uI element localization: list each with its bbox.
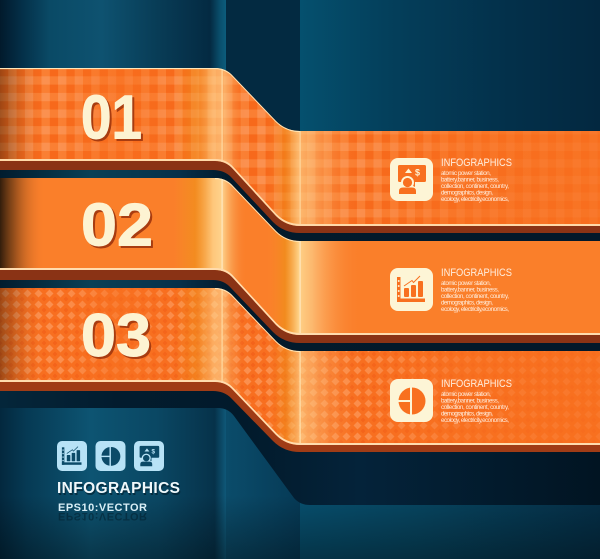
text block: ribbon 1: atomic power station, (441, 170, 491, 177)
text block: ribbon 3: INFOGRAPHICS (441, 378, 512, 390)
icon: bar chart on ribbon 2 (390, 268, 433, 311)
text block: ribbon 2: demographics, design, (441, 300, 493, 306)
ribbon 3 under-shadow (0, 381, 600, 452)
footer title: INFOGRAPHICS (57, 480, 180, 497)
footer subtitle with reflection (58, 502, 147, 522)
text block: ribbon 1: demographics, design, (441, 190, 493, 196)
ribbon 2: plain band (0, 170, 600, 340)
text block: ribbon 3: ecology, electricity,economics, (441, 417, 509, 424)
text block: ribbon 2: atomic power station, (441, 280, 491, 287)
number 01: 01 (83, 86, 144, 154)
text block: ribbon 3 (441, 378, 512, 424)
text block: ribbon 1 (441, 157, 512, 203)
number 02: 02 (81, 192, 153, 258)
text block: ribbon 2: collection, continent, country, (441, 293, 509, 300)
text block: ribbon 3: collection, continent, country, (441, 404, 509, 411)
number 02: 02 (83, 194, 155, 260)
text block: ribbon 1: INFOGRAPHICS (441, 157, 512, 169)
text block: ribbon 1: battery,banner, business, (441, 176, 499, 184)
footer title: INFOGRAPHICS (58, 482, 181, 499)
text block: ribbon 1: collection, continent, country, (441, 183, 509, 190)
background: bottom panels (0, 400, 600, 559)
icon: small pie (96, 441, 126, 471)
number 01: 01 (81, 84, 142, 152)
text block: ribbon 1: ecology, electricity,economics, (441, 196, 509, 203)
icon: small chart (57, 441, 87, 471)
text block: ribbon 2: ecology, electricity,economics, (441, 306, 509, 313)
icon: small presenter (134, 441, 164, 471)
footer subtitle with reflection: EPS10:VECTOR (58, 510, 147, 522)
lower dark shadow band (0, 385, 600, 505)
text block: ribbon 2: INFOGRAPHICS (441, 267, 512, 279)
number 03: 03 (83, 304, 153, 371)
text block: ribbon 2: battery,banner, business, (441, 286, 499, 294)
text block: ribbon 3: battery,banner, business, (441, 398, 499, 404)
number 03: 03 (81, 302, 151, 369)
ribbon 3: diamond band (0, 280, 600, 450)
footer subtitle with reflection: EPS10:VECTOR (58, 502, 147, 514)
ribbon 1: checker band (0, 60, 600, 230)
ribbon 2 under-shadow (0, 269, 600, 351)
icon: presenter on ribbon 1 (390, 158, 433, 201)
text block: ribbon 2 (441, 267, 512, 313)
text block: ribbon 3: demographics, design, (441, 410, 493, 418)
text block: ribbon 3: atomic power station, (441, 391, 491, 398)
ribbon 1 under-shadow (0, 160, 600, 241)
icon: pie chart on ribbon 3 (390, 379, 433, 422)
